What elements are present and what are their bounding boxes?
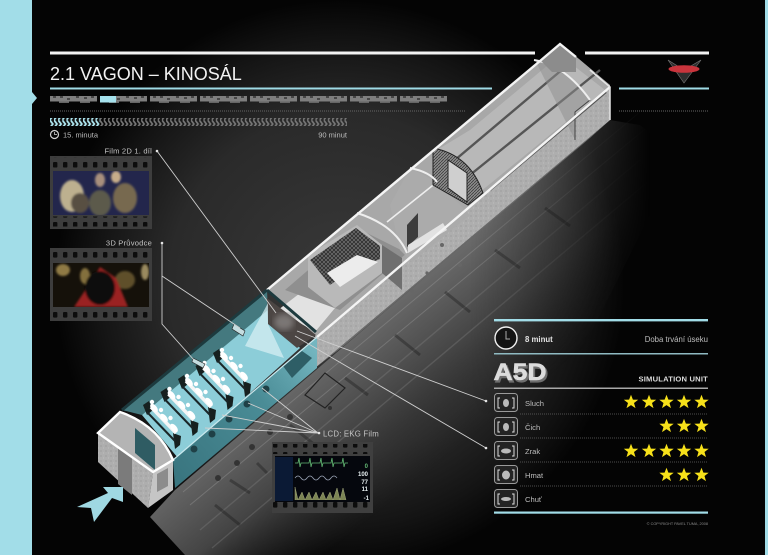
arches bbox=[357, 60, 590, 253]
far end block bbox=[540, 43, 576, 72]
row: Zrak bbox=[494, 442, 709, 460]
undercarriage bbox=[150, 120, 636, 555]
copyright: © COPYRIGHT PAVEL TUMA, 2008 bbox=[647, 522, 708, 526]
carriage navigation bbox=[50, 96, 447, 103]
wall projector 2 bbox=[232, 324, 245, 336]
cyan rule bbox=[50, 88, 492, 90]
front white edge bbox=[317, 87, 610, 337]
row: Hmat: Hmat bbox=[525, 471, 544, 480]
projection screen bbox=[267, 298, 316, 348]
entrance arrow bbox=[77, 487, 123, 522]
white floor by screen bbox=[278, 287, 335, 332]
film strip: LCD EKG: 77 bbox=[361, 480, 369, 486]
projection light cone bbox=[245, 303, 284, 358]
label: LCD EKG film: LCD: EKG Film bbox=[323, 430, 379, 438]
lower chassis band bbox=[315, 120, 610, 368]
title: 2.1 VAGON – KINOSÁL bbox=[50, 64, 242, 84]
seat rows bbox=[143, 348, 251, 449]
row: Sluch bbox=[494, 394, 709, 412]
label: 3D guide: 3D Průvodce bbox=[106, 238, 152, 248]
title line bbox=[50, 52, 535, 54]
row: Sluch: Sluch bbox=[525, 399, 544, 408]
shower room bbox=[308, 225, 402, 308]
top white edge bbox=[267, 44, 576, 290]
film strip: LCD EKG: 11 bbox=[362, 487, 369, 493]
front glass bbox=[173, 337, 317, 488]
back wall bbox=[122, 290, 268, 415]
dotted rules bbox=[50, 110, 708, 112]
middle room bbox=[387, 168, 470, 262]
film strip: LCD EKG bbox=[272, 442, 373, 513]
film strip: LCD EKG: 0 bbox=[365, 464, 369, 470]
outer floor band bbox=[315, 87, 610, 368]
simulation unit heading: SIMULATION UNIT bbox=[638, 374, 708, 384]
film strip: Film 2D bbox=[50, 156, 152, 229]
leader lines bbox=[157, 151, 486, 448]
row: Chuť: Chuť bbox=[525, 495, 542, 504]
dotted row rules bbox=[520, 414, 708, 486]
icon: clock bbox=[495, 327, 517, 349]
label: Film 2D: Film 2D 1. díl bbox=[104, 146, 152, 156]
cyan rule right bbox=[619, 88, 709, 90]
row: Zrak: Zrak bbox=[525, 447, 540, 456]
film strip: 3D guide bbox=[50, 248, 152, 321]
film strip: LCD EKG: 100 bbox=[358, 472, 369, 478]
left light blue band bbox=[0, 0, 32, 555]
floor vents bbox=[410, 243, 462, 293]
progress bar bbox=[50, 118, 347, 126]
duration label: Doba trvání úseku bbox=[645, 335, 708, 344]
title line right bbox=[585, 52, 709, 54]
panel: simulation ratings bbox=[494, 319, 709, 526]
cinema car glass section bbox=[122, 290, 317, 488]
cinema floor bbox=[142, 310, 300, 458]
section marker triangle bbox=[32, 92, 37, 104]
row: Čich: Čich bbox=[525, 423, 540, 432]
grey wall section bbox=[285, 228, 407, 310]
duration value: 8 minut bbox=[525, 335, 553, 344]
train body bbox=[267, 43, 610, 368]
front end of carriage bbox=[98, 412, 173, 508]
glass vents bbox=[190, 386, 270, 452]
A5D logo: A5D bbox=[495, 361, 548, 388]
right light blue band bbox=[765, 0, 768, 555]
wall projector bbox=[192, 358, 205, 368]
row: Čich bbox=[494, 418, 709, 436]
A5D logo: A5D bbox=[494, 359, 546, 386]
elapsed time: 15. minuta bbox=[63, 130, 99, 140]
row: Hmat bbox=[494, 466, 709, 484]
row: Chuť bbox=[494, 490, 542, 508]
clock icon bbox=[50, 130, 58, 138]
total time: 90 minut bbox=[318, 130, 348, 140]
logo bbox=[668, 60, 701, 83]
leader dots bbox=[156, 150, 487, 449]
end edge bbox=[590, 70, 610, 120]
film strip: LCD EKG: -1 bbox=[364, 496, 370, 502]
far glazed section bbox=[433, 55, 606, 205]
